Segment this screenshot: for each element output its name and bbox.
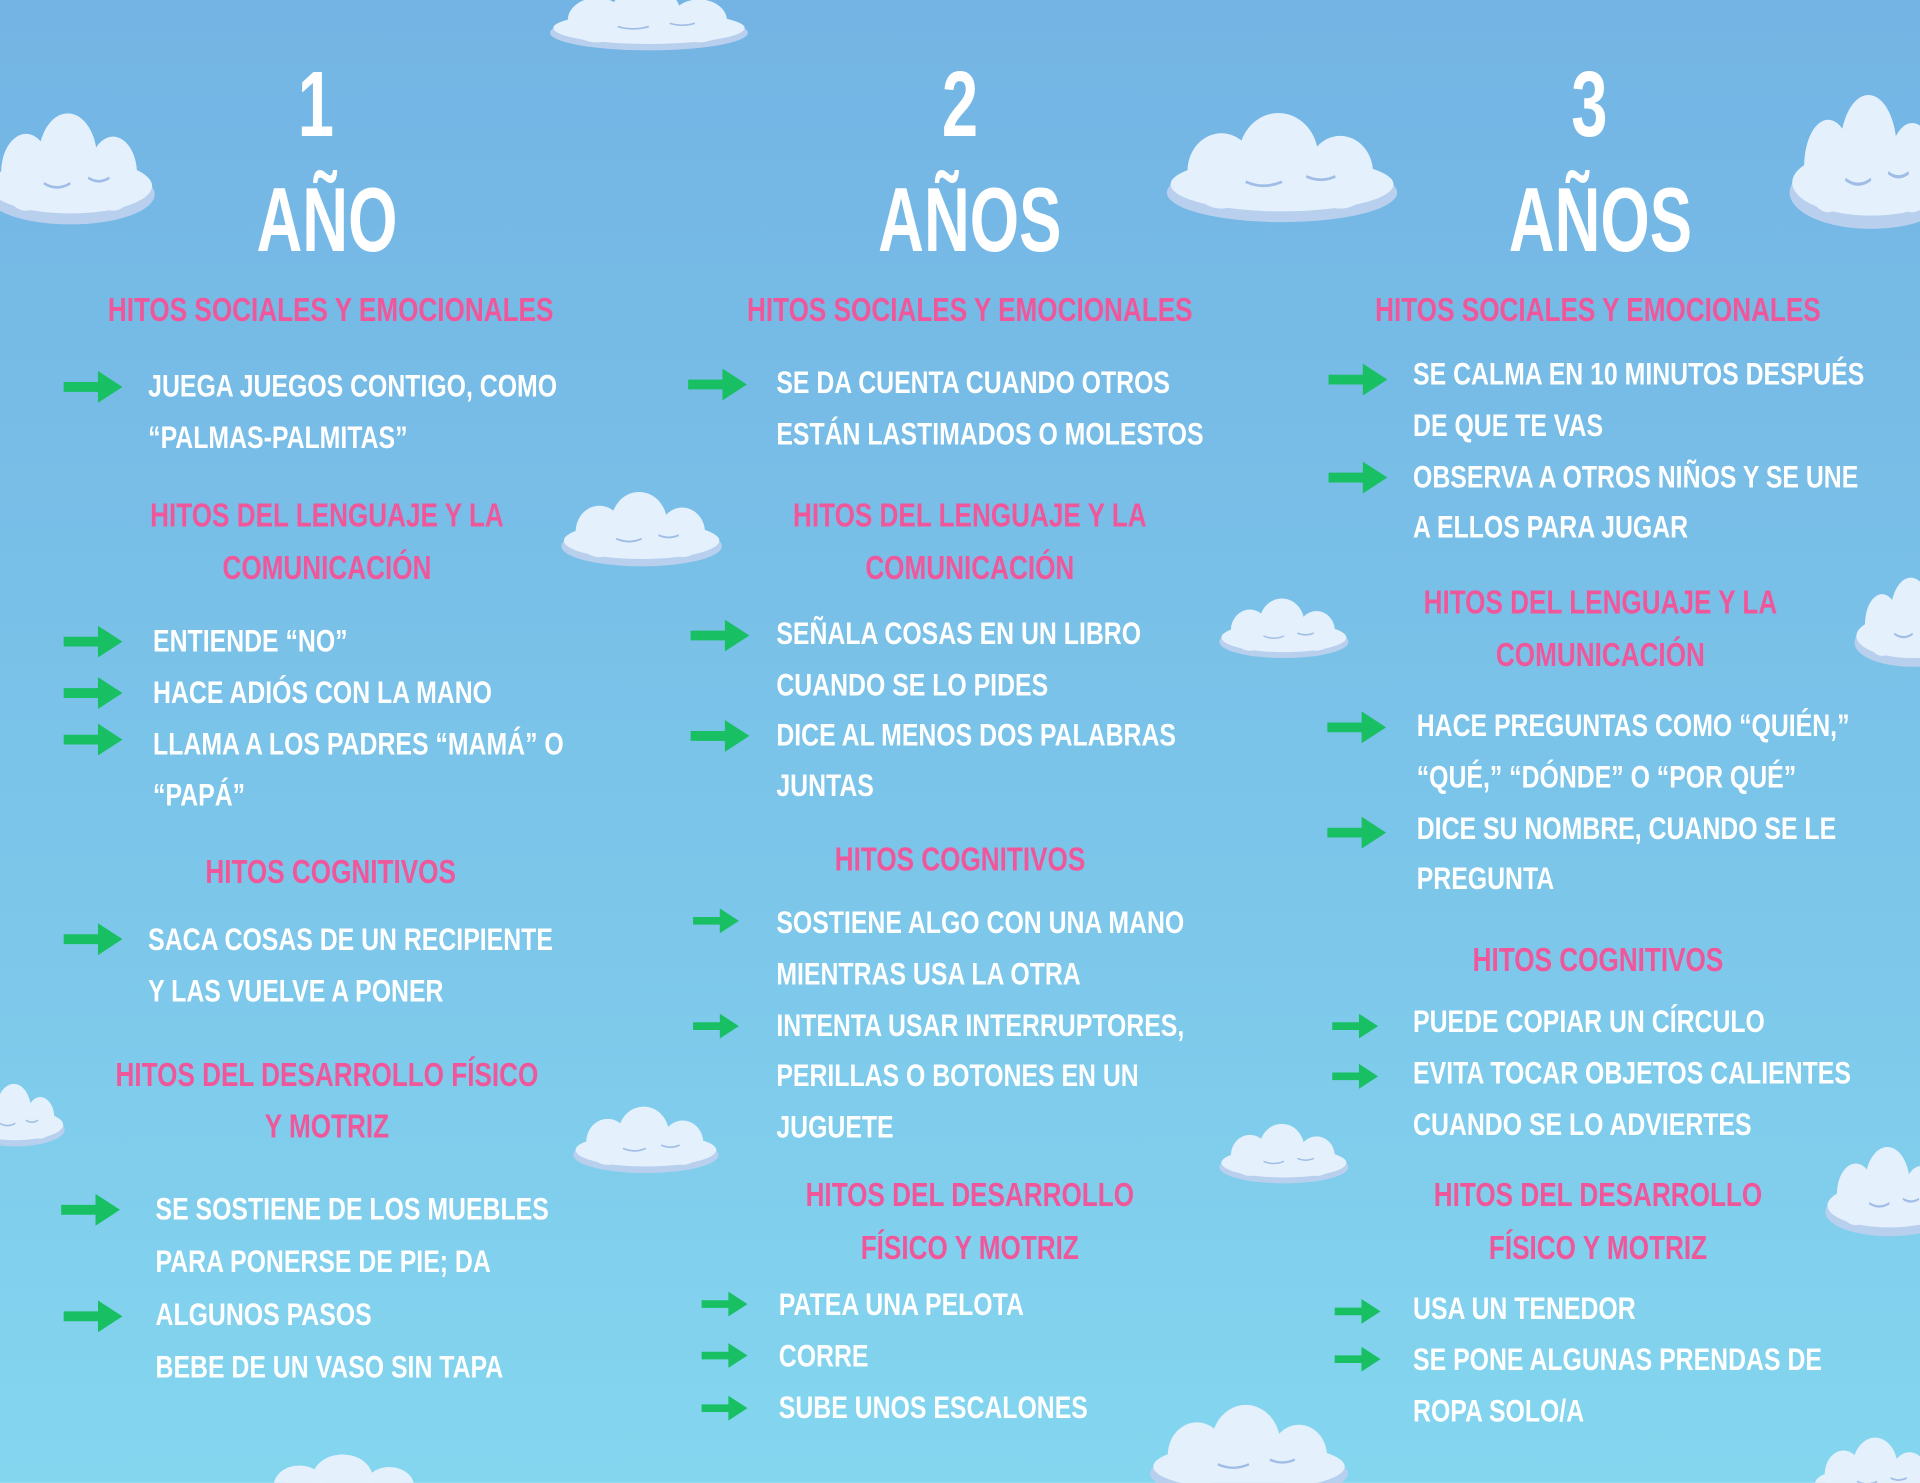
- column 2: ESTÁN LASTIMADOS O MOLESTOS: [776, 415, 1204, 452]
- column 2: HITOS COGNITIVOS: [835, 841, 1085, 878]
- column 3: A ELLOS PARA JUGAR: [1413, 508, 1688, 545]
- column 2: 2: [942, 53, 978, 157]
- column 1: SACA COSAS DE UN RECIPIENTE: [148, 921, 553, 958]
- column 1: SE SOSTIENE DE LOS MUEBLES: [156, 1190, 549, 1227]
- column 3: DICE SU NOMBRE, CUANDO SE LE: [1417, 809, 1836, 846]
- column 3: USA UN TENEDOR: [1413, 1289, 1636, 1326]
- column 2: JUNTAS: [776, 767, 874, 803]
- column 2: AÑOS: [878, 169, 1061, 271]
- column 3: HITOS SOCIALES Y EMOCIONALES: [1375, 291, 1821, 328]
- column 3: HACE PREGUNTAS COMO “QUIÉN,”: [1417, 707, 1850, 743]
- column 1: LLAMA A LOS PADRES “MAMÁ” O: [153, 725, 564, 762]
- column 2: SUBE UNOS ESCALONES: [779, 1389, 1088, 1425]
- column 3: SE CALMA EN 10 MINUTOS DESPUÉS: [1413, 355, 1864, 392]
- column 1: ALGUNOS PASOS: [156, 1296, 372, 1332]
- column 1: AÑO: [256, 169, 397, 271]
- column 1: HACE ADIÓS CON LA MANO: [153, 673, 492, 710]
- heading: HITOS SOCIALES Y EMOCIONALES: [108, 291, 553, 328]
- column 1: Y MOTRIZ: [265, 1108, 389, 1145]
- column 2: HITOS DEL DESARROLLO: [806, 1177, 1134, 1213]
- column 3: OBSERVA A OTROS NIÑOS Y SE UNE: [1413, 458, 1858, 495]
- column 2: SOSTIENE ALGO CON UNA MANO: [776, 904, 1184, 940]
- column 2: CUANDO SE LO PIDES: [776, 666, 1048, 703]
- column 1: JUEGA JUEGOS CONTIGO, COMO: [148, 367, 557, 404]
- column 3: “QUÉ,” “DÓNDE” O “POR QUÉ”: [1417, 758, 1796, 795]
- column 1: PARA PONERSE DE PIE; DA: [156, 1243, 491, 1280]
- column 1: ENTIENDE “NO”: [153, 622, 348, 659]
- column 1: “PAPÁ”: [153, 776, 245, 813]
- column 2: JUGUETE: [776, 1108, 894, 1145]
- column 2: FÍSICO Y MOTRIZ: [861, 1229, 1079, 1266]
- column 3: EVITA TOCAR OBJETOS CALIENTES: [1413, 1054, 1851, 1091]
- column 2: COMUNICACIÓN: [865, 550, 1074, 587]
- column 2: MIENTRAS USA LA OTRA: [776, 955, 1081, 992]
- column 1: HITOS DEL DESARROLLO FÍSICO: [116, 1057, 538, 1093]
- column 3: HITOS DEL DESARROLLO: [1434, 1177, 1762, 1213]
- column 3: COMUNICACIÓN: [1496, 637, 1705, 673]
- column 3: DE QUE TE VAS: [1413, 407, 1603, 443]
- column 3: PUEDE COPIAR UN CÍRCULO: [1413, 1003, 1765, 1040]
- column 1: BEBE DE UN VASO SIN TAPA: [156, 1348, 503, 1385]
- column 2: SEÑALA COSAS EN UN LIBRO: [776, 615, 1141, 651]
- column 1: HITOS COGNITIVOS: [205, 853, 456, 890]
- column 1: [108, 53, 564, 1385]
- column 3: AÑOS: [1509, 169, 1692, 271]
- title: 1 año: 1: [298, 53, 334, 157]
- column 1: Y LAS VUELVE A PONER: [148, 972, 443, 1009]
- column 1: “PALMAS-PALMITAS”: [148, 419, 408, 456]
- column 2: HITOS DEL LENGUAJE Y LA: [793, 497, 1147, 534]
- column 3: [1375, 53, 1864, 1429]
- column 2: SE DA CUENTA CUANDO OTROS: [776, 364, 1170, 400]
- column 2: CORRE: [779, 1337, 868, 1374]
- column 3: CUANDO SE LO ADVIERTES: [1413, 1106, 1752, 1142]
- column 3: FÍSICO Y MOTRIZ: [1489, 1229, 1707, 1266]
- column 2: HITOS SOCIALES Y EMOCIONALES: [747, 291, 1193, 328]
- column 1: HITOS DEL LENGUAJE Y LA: [150, 497, 504, 534]
- column 3: 3: [1571, 53, 1608, 157]
- column 2: INTENTA USAR INTERRUPTORES,: [776, 1007, 1184, 1043]
- column 3: HITOS DEL LENGUAJE Y LA: [1424, 584, 1777, 621]
- column 2: PERILLAS O BOTONES EN UN: [776, 1057, 1139, 1093]
- column 1: COMUNICACIÓN: [222, 550, 431, 587]
- column 3: PREGUNTA: [1417, 860, 1554, 896]
- column 2: PATEA UNA PELOTA: [779, 1286, 1024, 1322]
- column 2: DICE AL MENOS DOS PALABRAS: [776, 716, 1176, 753]
- column 3: SE PONE ALGUNAS PRENDAS DE: [1413, 1341, 1822, 1378]
- column 2: [747, 53, 1204, 1425]
- column 3: HITOS COGNITIVOS: [1473, 942, 1723, 978]
- column 3: ROPA SOLO/A: [1413, 1392, 1584, 1429]
